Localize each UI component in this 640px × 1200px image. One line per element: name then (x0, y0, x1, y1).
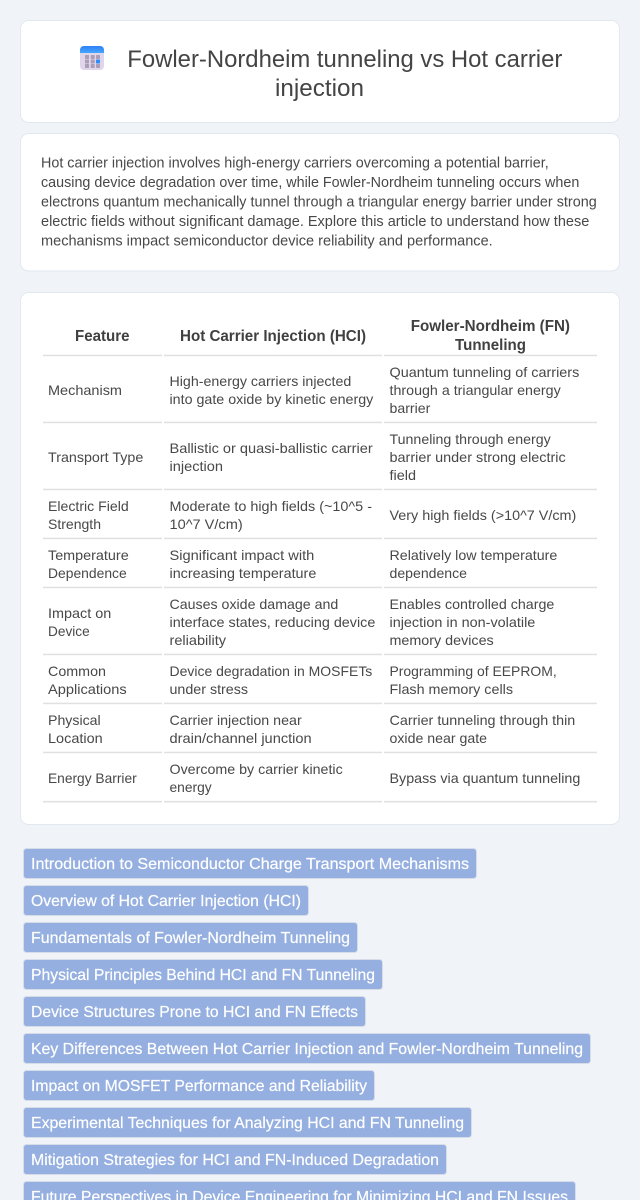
row: physical location: Physical (48, 712, 101, 728)
row: electric field strength: Strength (48, 516, 101, 532)
row: energy barrier (43, 761, 597, 802)
chip: mitigation strategies (24, 1144, 446, 1174)
chip: introduction (24, 848, 476, 878)
chip: fundamentals of FN (24, 922, 358, 952)
chip: experimental techniques (24, 1108, 472, 1138)
row: mechanism: High-energy carriers injected (170, 373, 351, 389)
row: common applications: Programming of EEPROM, (390, 663, 557, 679)
title: Fowler-Nordheim tunneling vs Hot carrier (127, 46, 562, 73)
row: impact on device: Enables controlled charge (390, 596, 555, 612)
row: mechanism: into gate oxide by kinetic energy (170, 391, 373, 407)
row: impact on device: interface states, reducing device (170, 614, 376, 630)
row: impact on device: injection in non-volatile (390, 614, 536, 630)
table header row: Hot Carrier Injection (HCI) (180, 328, 366, 345)
row: common applications: Device degradation in MOSFETs (170, 663, 372, 679)
row: energy barrier: Bypass via quantum tunneling (390, 770, 580, 786)
chip: key differences (24, 1034, 590, 1064)
chip: overview of HCI (24, 886, 308, 916)
text block: intro paragraph: mechanisms impact semiconductor device reliability and performance. (41, 234, 493, 250)
title: injection (275, 75, 364, 102)
row: temperature dependence: Relatively low temperature (390, 547, 558, 563)
row: common applications: Applications (48, 681, 127, 697)
row: energy barrier: Overcome by carrier kinetic (170, 761, 343, 777)
chip: device structures: Device Structures Prone to HCI and FN Effects (31, 1004, 358, 1021)
title (127, 46, 562, 102)
text block: intro paragraph: causing device degradation over time, while Fowler-Nordheim tunneling occurs when (41, 175, 579, 191)
chip: key differences: Key Differences Between Hot Carrier Injection and Fowler-Nordheim Tunneling (31, 1041, 583, 1058)
row: transport type: Transport Type (48, 449, 144, 465)
row: impact on device: Device (48, 623, 90, 639)
icon: calendar (80, 46, 104, 70)
row: transport type (43, 431, 597, 490)
row: physical location: drain/channel junction (170, 730, 312, 746)
chip: physical principles: Physical Principles Behind HCI and FN Tunneling (31, 967, 375, 984)
row: impact on device: reliability (170, 632, 226, 648)
row: energy barrier: energy (170, 779, 212, 795)
row: temperature dependence: Dependence (48, 565, 127, 581)
chip: MOSFET impact (24, 1070, 374, 1100)
row: electric field strength: Electric Field (48, 498, 129, 514)
row: electric field strength: Moderate to high fields (~10^5 - (170, 498, 372, 514)
row: temperature dependence: increasing temperature (170, 565, 317, 581)
chip: future perspectives (24, 1182, 576, 1200)
row: temperature dependence: Temperature (48, 547, 129, 563)
row: mechanism: Mechanism (48, 382, 122, 398)
row: transport type: injection (170, 458, 223, 474)
row: impact on device: Causes oxide damage and (170, 596, 338, 612)
row: physical location (43, 712, 597, 753)
row: physical location: Location (48, 730, 103, 746)
text block: intro paragraph: electrons quantum mechanically tunnel through a triangular energy barrier under strong (41, 194, 597, 210)
chip: experimental techniques: Experimental Techniques for Analyzing HCI and FN Tunneling (31, 1115, 464, 1132)
row: temperature dependence: Significant impact with (170, 547, 314, 563)
row: transport type: field (390, 467, 416, 483)
list: table of contents chips (24, 848, 590, 1200)
table header row (43, 318, 597, 356)
row: common applications: Common (48, 663, 106, 679)
panel: header (20, 20, 620, 122)
chip: device structures (24, 996, 366, 1026)
row: impact on device: Impact on (48, 605, 111, 621)
row: physical location: Carrier tunneling through thin (390, 712, 575, 728)
row: electric field strength (43, 498, 597, 539)
row: mechanism: through a triangular energy (390, 382, 561, 398)
chip: MOSFET impact: Impact on MOSFET Performance and Reliability (31, 1078, 367, 1095)
row: electric field strength: 10^7 V/cm) (170, 516, 243, 532)
row: impact on device (43, 596, 597, 655)
text block: intro paragraph: electric fields without significant damage. Explore this article to understand how these (41, 214, 589, 230)
row: transport type: Ballistic or quasi-ballistic carrier (170, 440, 373, 456)
row: common applications: Flash memory cells (390, 681, 513, 697)
text block: intro paragraph: Hot carrier injection involves high-energy carriers overcoming a potential barrier, (41, 156, 549, 172)
row: temperature dependence (43, 547, 597, 588)
chip: fundamentals of FN: Fundamentals of Fowler-Nordheim Tunneling (31, 930, 350, 947)
chip: overview of HCI: Overview of Hot Carrier Injection (HCI) (31, 893, 301, 910)
row: impact on device: memory devices (390, 632, 494, 648)
chip: mitigation strategies: Mitigation Strategies for HCI and FN-Induced Degradation (31, 1152, 439, 1169)
table header row: Fowler-Nordheim (FN) (411, 318, 570, 335)
row: temperature dependence: dependence (390, 565, 467, 581)
row: common applications: under stress (170, 681, 248, 697)
row: transport type: barrier under strong electric (390, 449, 566, 465)
table header row: Tunneling (455, 337, 526, 354)
row: physical location: Carrier injection near (170, 712, 302, 728)
panel: introduction (20, 134, 620, 271)
chip: physical principles (24, 960, 382, 990)
row: mechanism: Quantum tunneling of carriers (390, 364, 579, 380)
row: mechanism: barrier (390, 400, 431, 416)
row: electric field strength: Very high fields (>10^7 V/cm) (390, 507, 576, 523)
row: transport type: Tunneling through energy (390, 431, 551, 447)
row: common applications (43, 663, 597, 704)
panel: comparison table (20, 292, 620, 824)
text block: intro paragraph (41, 156, 597, 250)
row: energy barrier: Energy Barrier (48, 770, 137, 786)
row: mechanism (43, 364, 597, 423)
chip: introduction: Introduction to Semiconductor Charge Transport Mechanisms (31, 856, 469, 873)
table header row: Feature (75, 328, 130, 345)
row: physical location: oxide near gate (390, 730, 487, 746)
